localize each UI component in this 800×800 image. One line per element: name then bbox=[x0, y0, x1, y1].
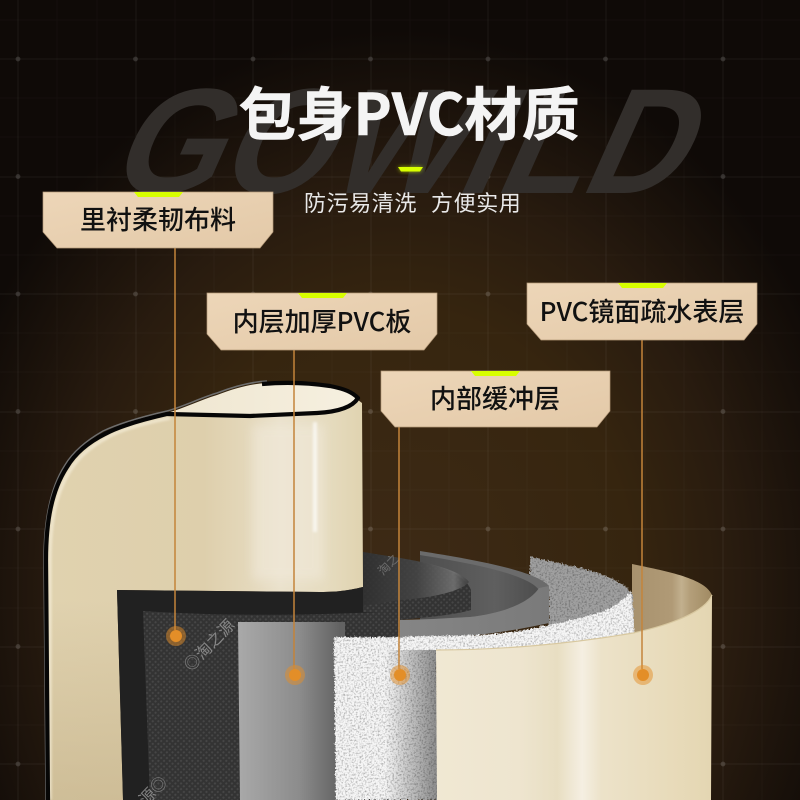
label: inner PVC board: 内层加厚PVC板 bbox=[233, 302, 411, 339]
title accent dash bbox=[398, 167, 423, 172]
label: mirror surface layer: PVC镜面疏水表层 bbox=[540, 292, 744, 329]
label: mirror surface layer bbox=[527, 283, 757, 340]
bag body: cream top and left strip bbox=[45, 400, 363, 800]
mesh fabric panel: ◎淘之源 bbox=[177, 613, 239, 675]
back of cream outer layer bbox=[632, 564, 712, 636]
grey PVC front panel bbox=[238, 622, 345, 800]
cream outer layer front bbox=[436, 595, 712, 800]
label: inner PVC board bbox=[207, 293, 437, 350]
back of grey PVC layer bbox=[340, 551, 549, 640]
leader line and dot: lining bbox=[166, 248, 186, 646]
label: cushion layer bbox=[381, 371, 610, 427]
label: lining: 里衬柔韧布料 bbox=[80, 200, 236, 237]
leader line and dot: cushion bbox=[390, 427, 410, 685]
foam layer front bbox=[334, 591, 635, 800]
leader line and dot: inner PVC bbox=[285, 350, 305, 685]
subtitle: 防污易清洗 bbox=[304, 186, 417, 218]
back of foam layer bbox=[530, 557, 634, 640]
back of dark lining layer bbox=[363, 552, 471, 622]
bag top opening bbox=[167, 382, 357, 415]
bag black outline bbox=[44, 381, 358, 800]
dark lining front panel bbox=[117, 587, 400, 800]
label: cushion layer: 内部缓冲层 bbox=[430, 379, 560, 416]
title: 包身PVC材质 bbox=[239, 68, 579, 152]
label: lining bbox=[43, 192, 273, 248]
mesh fabric panel bbox=[132, 550, 403, 800]
mesh fabric panel: 淘之 bbox=[374, 550, 403, 579]
product: layered cross-section bbox=[44, 381, 712, 800]
leader line and dot: surface bbox=[633, 340, 653, 685]
subtitle: 方便实用 bbox=[431, 186, 521, 218]
watermark logo GOWILD: GOWILD bbox=[91, 59, 737, 225]
